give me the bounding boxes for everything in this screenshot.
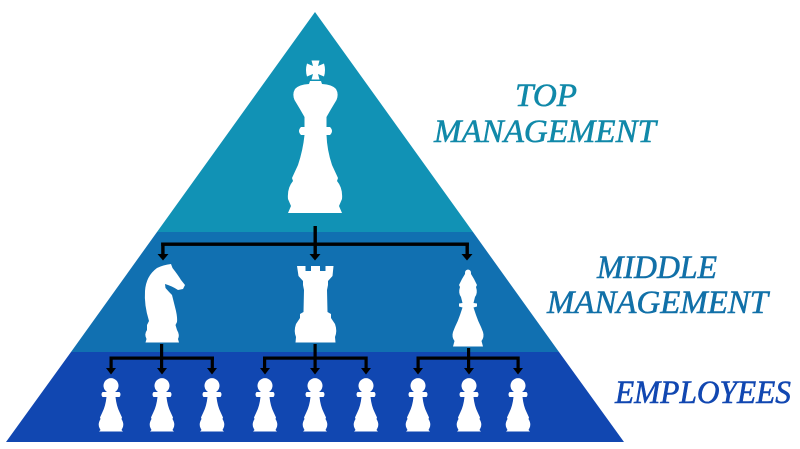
pyramid xyxy=(6,12,624,442)
label: top management: TOP xyxy=(515,78,577,114)
arrows: rook to pawns xyxy=(260,344,371,374)
tier: middle management xyxy=(71,232,559,352)
arrows: bishop to pawns xyxy=(413,348,523,374)
icon: rook xyxy=(295,266,336,342)
label: middle management: MANAGEMENT xyxy=(546,285,771,321)
icon: king xyxy=(288,60,342,213)
arrows: top to middle xyxy=(158,226,472,260)
label: employees: EMPLOYEES xyxy=(614,375,791,411)
label: top management xyxy=(433,78,659,150)
icon: bishop xyxy=(452,270,484,346)
tier: top management xyxy=(157,12,473,232)
tier: employees xyxy=(6,352,624,442)
label: middle management xyxy=(546,250,771,321)
icon: knight xyxy=(145,264,185,342)
arrows: knight to pawns xyxy=(106,344,217,374)
icons: row of pawns xyxy=(99,378,530,432)
label: middle management: MIDDLE xyxy=(596,250,717,286)
label: top management: MANAGEMENT xyxy=(433,114,659,150)
